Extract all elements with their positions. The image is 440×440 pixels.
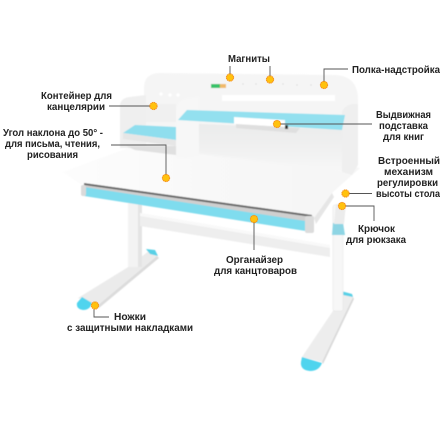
callout: крючок: для рюкзака	[346, 234, 406, 246]
left hutch divider	[176, 97, 199, 158]
callout: выдвижная подставка: для книг	[383, 131, 425, 143]
container	[120, 92, 180, 155]
callout: ножки	[67, 302, 193, 334]
callout: контейнер для канцелярии: Контейнер для	[41, 90, 112, 102]
callout: полка-надстройка	[320, 64, 440, 89]
callout: угол наклона: для письма, чтения,	[5, 138, 100, 150]
callout: органайзер: Органайзер	[226, 254, 283, 266]
magnet dots	[242, 83, 312, 86]
desktop surface	[62, 142, 360, 218]
callout: угол наклона: рисования	[27, 149, 78, 161]
callout: механизм регулировки	[342, 155, 440, 200]
callout: органайзер	[214, 215, 297, 277]
book stand	[234, 117, 300, 133]
callout: ножки: Ножки	[114, 311, 146, 323]
callout: выдвижная подставка: подставка	[379, 120, 428, 132]
callout: магниты	[226, 53, 274, 83]
hutch back panel	[144, 73, 358, 170]
callout: угол наклона: Угол наклона до 50° -	[3, 127, 103, 139]
callout: контейнер для канцелярии	[41, 90, 157, 113]
callout: контейнер для канцелярии: канцелярии	[47, 101, 105, 113]
callout: магниты: Магниты	[228, 53, 270, 65]
callout: ножки: с защитными накладками	[67, 322, 193, 334]
crossbar	[140, 213, 330, 257]
green label	[211, 84, 226, 88]
desk illustration	[62, 73, 360, 371]
callout: крючок: Крючок	[358, 223, 396, 235]
upper shelf	[178, 110, 345, 130]
callout: угол наклона	[3, 127, 170, 182]
callout: выдвижная подставка: Выдвижная	[376, 109, 431, 121]
organizer drawer	[81, 183, 314, 233]
right leg and foot	[301, 204, 354, 371]
callout: органайзер: для канцтоваров	[214, 265, 297, 277]
callout: крючок	[338, 202, 406, 246]
callout: механизм регулировки: механизм	[384, 166, 433, 178]
callout: выдвижная подставка	[273, 109, 431, 143]
right hutch side	[342, 104, 358, 175]
left leg and foot	[77, 200, 159, 310]
